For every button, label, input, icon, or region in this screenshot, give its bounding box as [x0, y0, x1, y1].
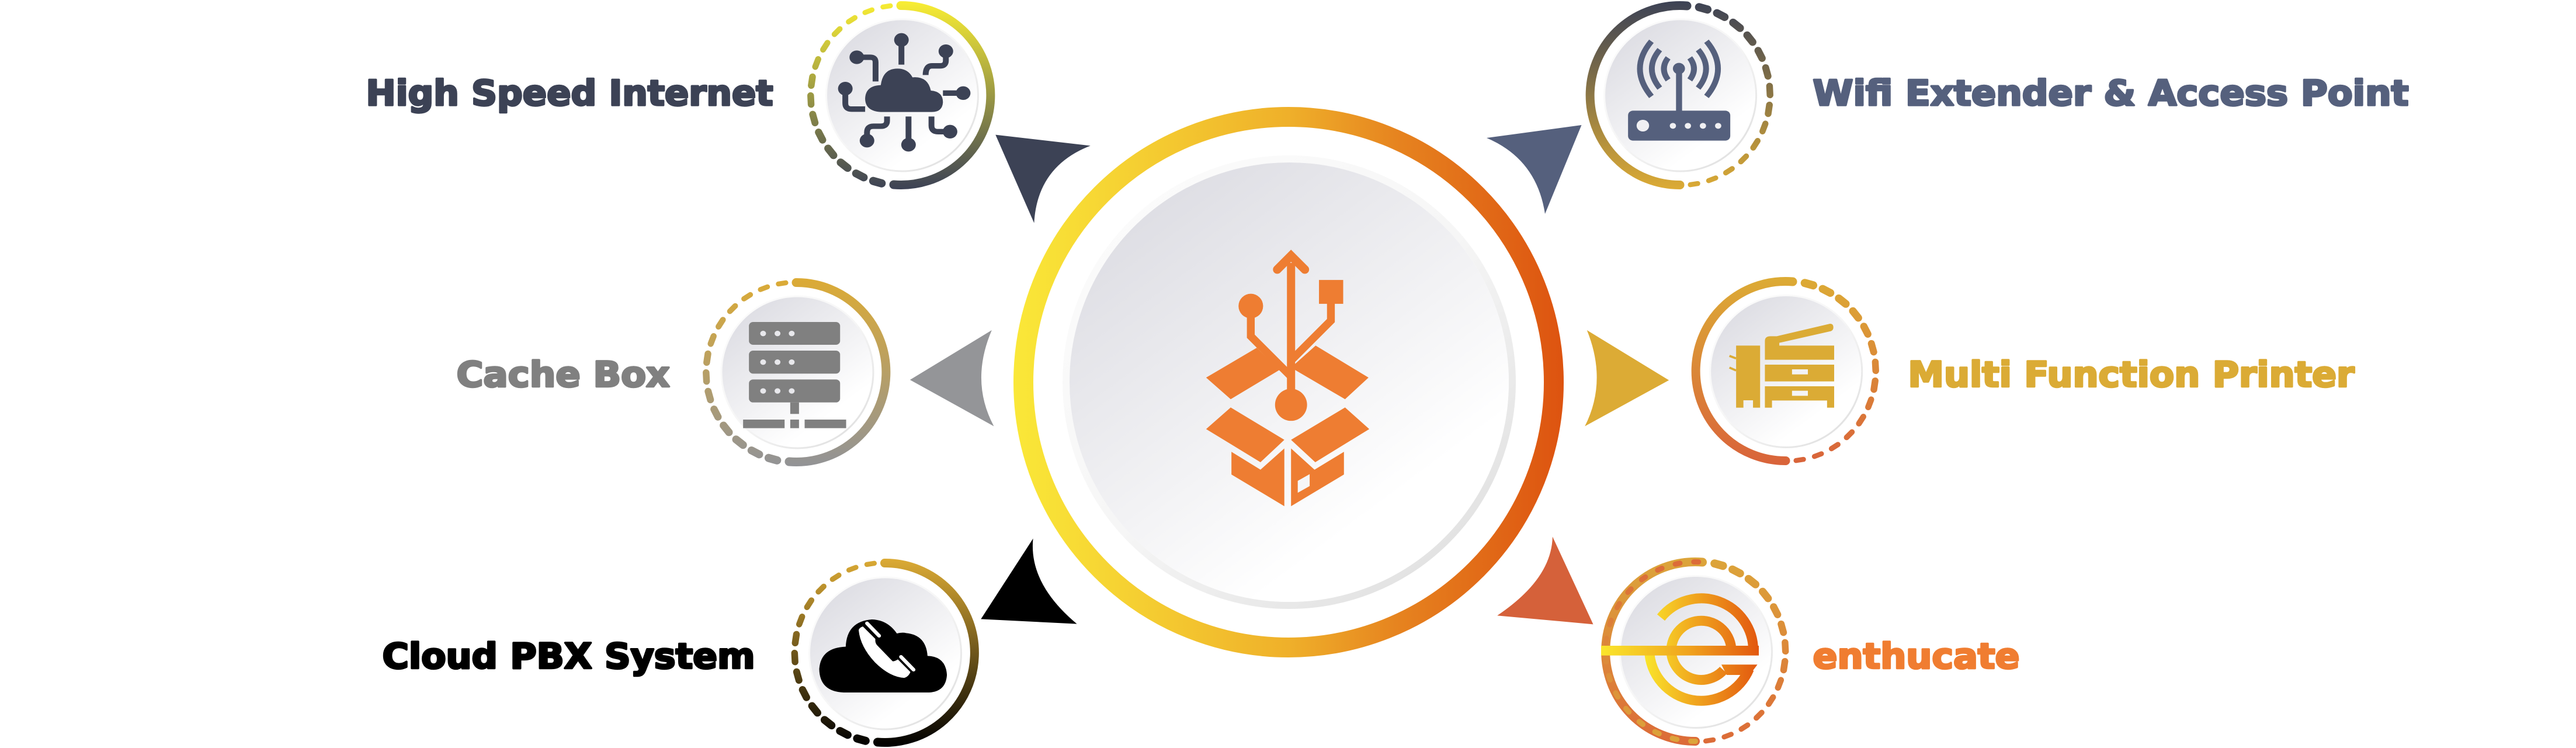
central hub [1023, 117, 1554, 647]
icon: cloud phone [819, 619, 947, 692]
dashed ring [1590, 6, 1770, 185]
label: Cloud PBX System: Cloud PBX System [382, 637, 755, 677]
arrow: multi function printer [1585, 330, 1669, 426]
arrow: wifi extender [1487, 125, 1581, 214]
gradient ring [1023, 117, 1554, 647]
label: Multi Function Printer: Multi Function Printer [1908, 355, 2355, 395]
icon: printer [1730, 324, 1834, 408]
dashed ring [1606, 562, 1786, 742]
icon: cloud network [838, 33, 970, 151]
label: Wifi Extender & Access Point: Wifi Extender & Access Point [1813, 74, 2409, 114]
node: cache box [706, 282, 886, 462]
ring overlay dashes [1606, 562, 1702, 742]
dashed ring [811, 5, 991, 185]
disc [810, 577, 961, 729]
dashed ring [706, 282, 886, 462]
node: multi function printer [1696, 282, 1876, 461]
dashed ring [1696, 282, 1876, 461]
icon: open box with USB symbol [1206, 256, 1369, 506]
icon: server rack [743, 322, 846, 428]
arrow: high speed internet [995, 135, 1091, 223]
hub disc [1070, 162, 1509, 602]
icon: router [1628, 41, 1730, 141]
disc [721, 296, 873, 448]
label: enthucate: enthucate [1813, 637, 2020, 677]
node: cloud PBX system [794, 563, 974, 742]
arrow: cloud PBX [981, 539, 1077, 624]
arrow: cache box [910, 330, 994, 426]
arrow: enthucate [1497, 536, 1593, 624]
hub disc rim [1066, 159, 1512, 605]
disc [1620, 576, 1772, 728]
disc [826, 19, 978, 171]
disc [1710, 296, 1862, 448]
node: wifi extender [1590, 6, 1770, 185]
disc [1605, 19, 1756, 171]
icon: enthucate logo [1601, 598, 1759, 701]
label: High Speed Internet: High Speed Internet [366, 74, 773, 114]
node: high speed internet [811, 5, 991, 185]
dashed ring [794, 563, 974, 742]
label: Cache Box: Cache Box [457, 355, 669, 395]
node: enthucate [1601, 562, 1786, 742]
